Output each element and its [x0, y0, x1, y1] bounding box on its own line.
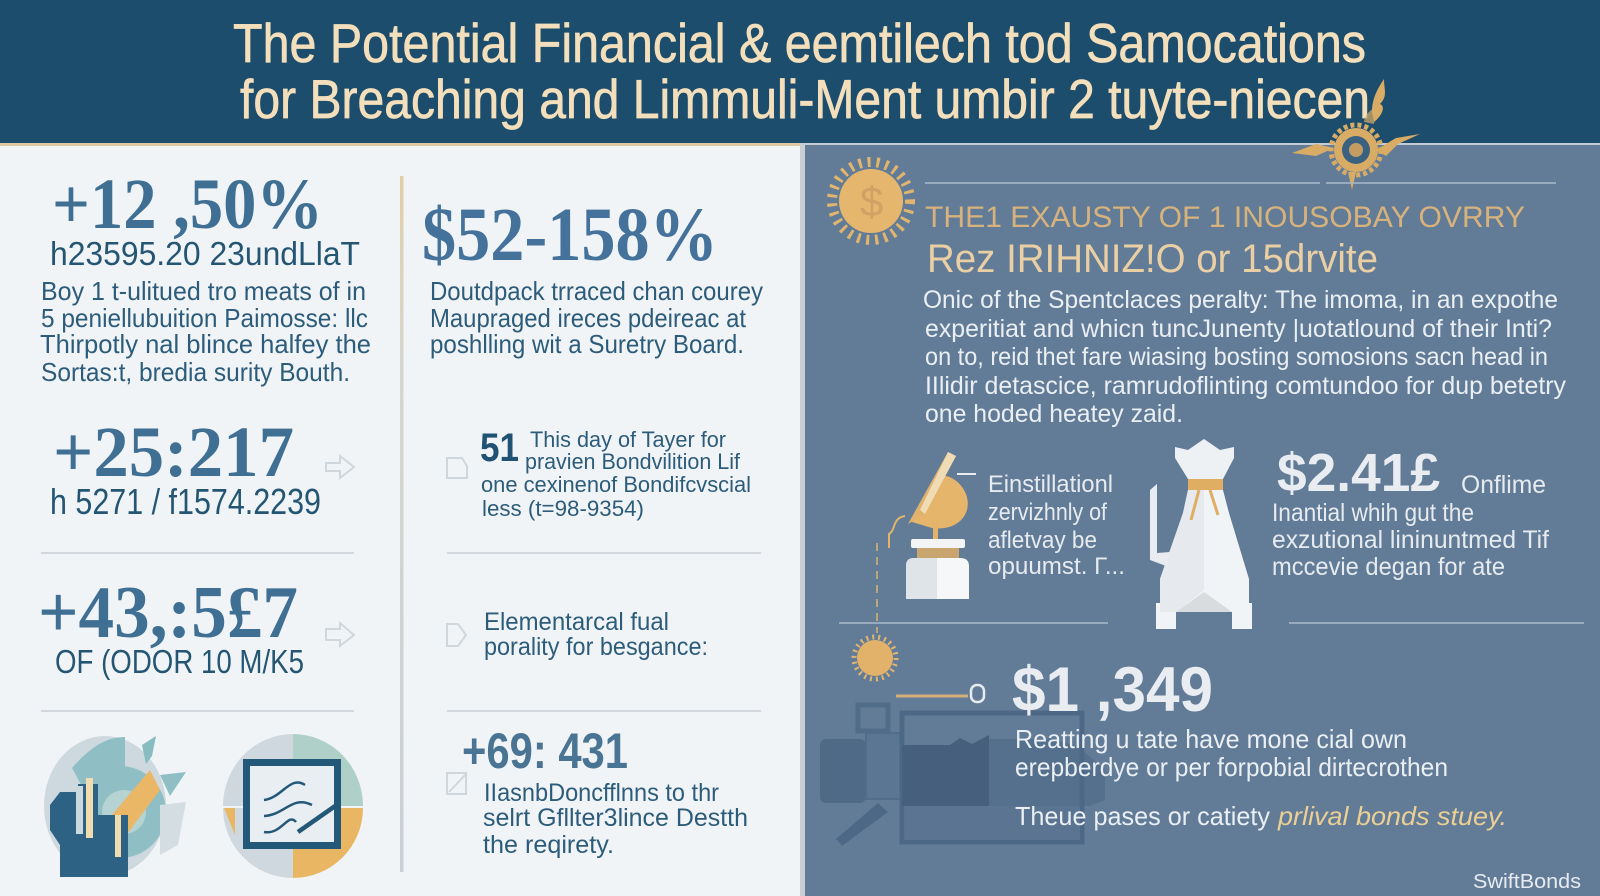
text block: right intro — [430, 276, 763, 359]
text block: online: Onflime — [1461, 471, 1546, 499]
text block: right intro: Maupraged ireces pdeireac at — [430, 303, 747, 333]
stat: +12,50%: +12 ,50% — [52, 164, 323, 244]
stat: +25:217: +25:217 — [53, 412, 294, 492]
icon: gold dollar sun — [832, 162, 910, 240]
icon: arrow — [326, 623, 354, 646]
text block: right body: one hoded heatey zaid. — [925, 400, 1183, 428]
stat: $1,349: $1 ,349 — [1012, 655, 1213, 725]
icon: tag — [447, 624, 466, 646]
heading: right panel: Rez IRIHNIZ!O or 15drvite — [927, 237, 1378, 281]
panel: left background — [0, 146, 801, 896]
text block: left intro: Thirpotly nal blince halfey the — [40, 329, 371, 359]
text block: online — [1272, 471, 1549, 581]
text block: left intro: 5 peniellubuition Paimosse: llc — [41, 303, 368, 333]
text block: elemental penalty — [484, 608, 708, 661]
text block: right intro: Doutdpack trraced chan courey — [430, 276, 763, 306]
text block: bond: IIasnbDoncfflnns to thr — [484, 779, 719, 807]
stat subtitle: h23595.20 23undLlaT — [50, 235, 360, 272]
stat subtitle: OF (ODOR 10 M/K5 — [55, 643, 304, 680]
text block: realting — [1015, 724, 1448, 782]
callout: closing line — [1015, 801, 1507, 831]
heading: right panel — [925, 201, 1525, 281]
stat: 51 day: less (t=98-9354) — [482, 496, 644, 521]
title — [233, 12, 1370, 130]
stat: 51 day: one cexinenof Bondifcvscial — [481, 472, 751, 497]
stat: $2.41£: $2.41£ — [1277, 443, 1440, 503]
title: The Potential Financial & eemtilech tod Samocations — [233, 12, 1366, 74]
panel: right background — [801, 144, 1600, 896]
text block: realting: Reatting u tate have mone cial own — [1015, 724, 1407, 754]
text block: right body: IIlidir detascice, ramrudoflinting comtundoo for dup betetry — [925, 372, 1566, 400]
stat: $52-158%: $52-158% — [422, 193, 718, 277]
stat: 51 day: 51 — [480, 426, 519, 470]
text block: bond: selrt Gfllter3lince Destth — [483, 804, 748, 832]
text block: installation — [988, 471, 1125, 580]
icon: small gold sun — [854, 637, 896, 679]
icon: white bond figure — [1150, 439, 1252, 629]
callout: closing line: prlival bonds stuey. — [1277, 801, 1507, 831]
header band — [0, 0, 1600, 146]
text block: left intro: Sortas:t, bredia surity Bouth. — [41, 357, 350, 387]
text block: right body — [923, 286, 1566, 428]
title: for Breaching and Limmuli-Ment umbir 2 tuyte-niecen — [240, 68, 1370, 130]
text block: right intro: poshlling wit a Suretry Board. — [430, 329, 744, 359]
text block: online: Inantial whih gut the — [1272, 499, 1474, 527]
icon: pencil note — [447, 773, 466, 794]
icon: gold gear ornament — [1292, 79, 1420, 190]
text block: online: mccevie degan for ate — [1272, 553, 1505, 581]
stat: +43,5£7: +43,:5£7 — [38, 572, 298, 654]
text block: installation: zervizhnly of — [988, 499, 1107, 526]
text block: online: exzutional lininuntmed Tif — [1272, 526, 1549, 554]
icon: document — [447, 458, 467, 478]
text block: installation: opuumst. Γ... — [988, 553, 1125, 580]
text block: installation: afletvay be — [988, 527, 1097, 554]
text block: elemental penalty: Elementarcal fual — [484, 608, 669, 636]
stat: +69:431: +69: 431 — [462, 723, 628, 779]
icon: chart in circle — [223, 734, 363, 878]
heading: right panel: THE1 EXAUSTY OF 1 INOUSOBAY OVRRY — [925, 201, 1525, 234]
icon: faded machine — [820, 705, 1105, 846]
icon: hand and chart circle — [44, 736, 186, 877]
stat subtitle: h 5271 / f1574.2239 — [50, 481, 321, 522]
brand: SwiftBonds: SwiftBonds — [1473, 871, 1581, 893]
text block: bond: the reqirety. — [483, 831, 614, 859]
stat: 51 day — [480, 426, 751, 521]
icon: gold key line — [896, 685, 984, 702]
text block: left intro: Boy 1 t-ulitued tro meats of in — [41, 276, 366, 306]
text block: installation: Einstillationl — [988, 471, 1113, 498]
text block: elemental penalty: porality for besgance: — [484, 633, 708, 661]
text block: right body: on to, reid thet fare wiasing bosting somosions sacn head in — [925, 343, 1548, 371]
text block: left intro — [40, 276, 371, 387]
callout: closing line: Theue pases or catiety — [1015, 801, 1270, 831]
text block: right body: Onic of the Spentclaces peralty: The imoma, in an expothe — [923, 286, 1558, 314]
text block: bond — [483, 779, 748, 859]
icon: gold dollar sun: $ — [860, 178, 883, 225]
icon: arrow — [326, 456, 354, 478]
text block: realting: erepberdye or per forpobial dirtecrothen — [1015, 752, 1448, 782]
icon: quill and ink jar — [877, 452, 976, 633]
stat: 51 day: pravien Bondvilition Lif — [525, 449, 741, 474]
stat: 51 day: This day of Tayer for — [530, 427, 726, 452]
text block: right body: experitiat and whicn tuncJunenty |uotatlound of their Inti? — [925, 315, 1552, 343]
